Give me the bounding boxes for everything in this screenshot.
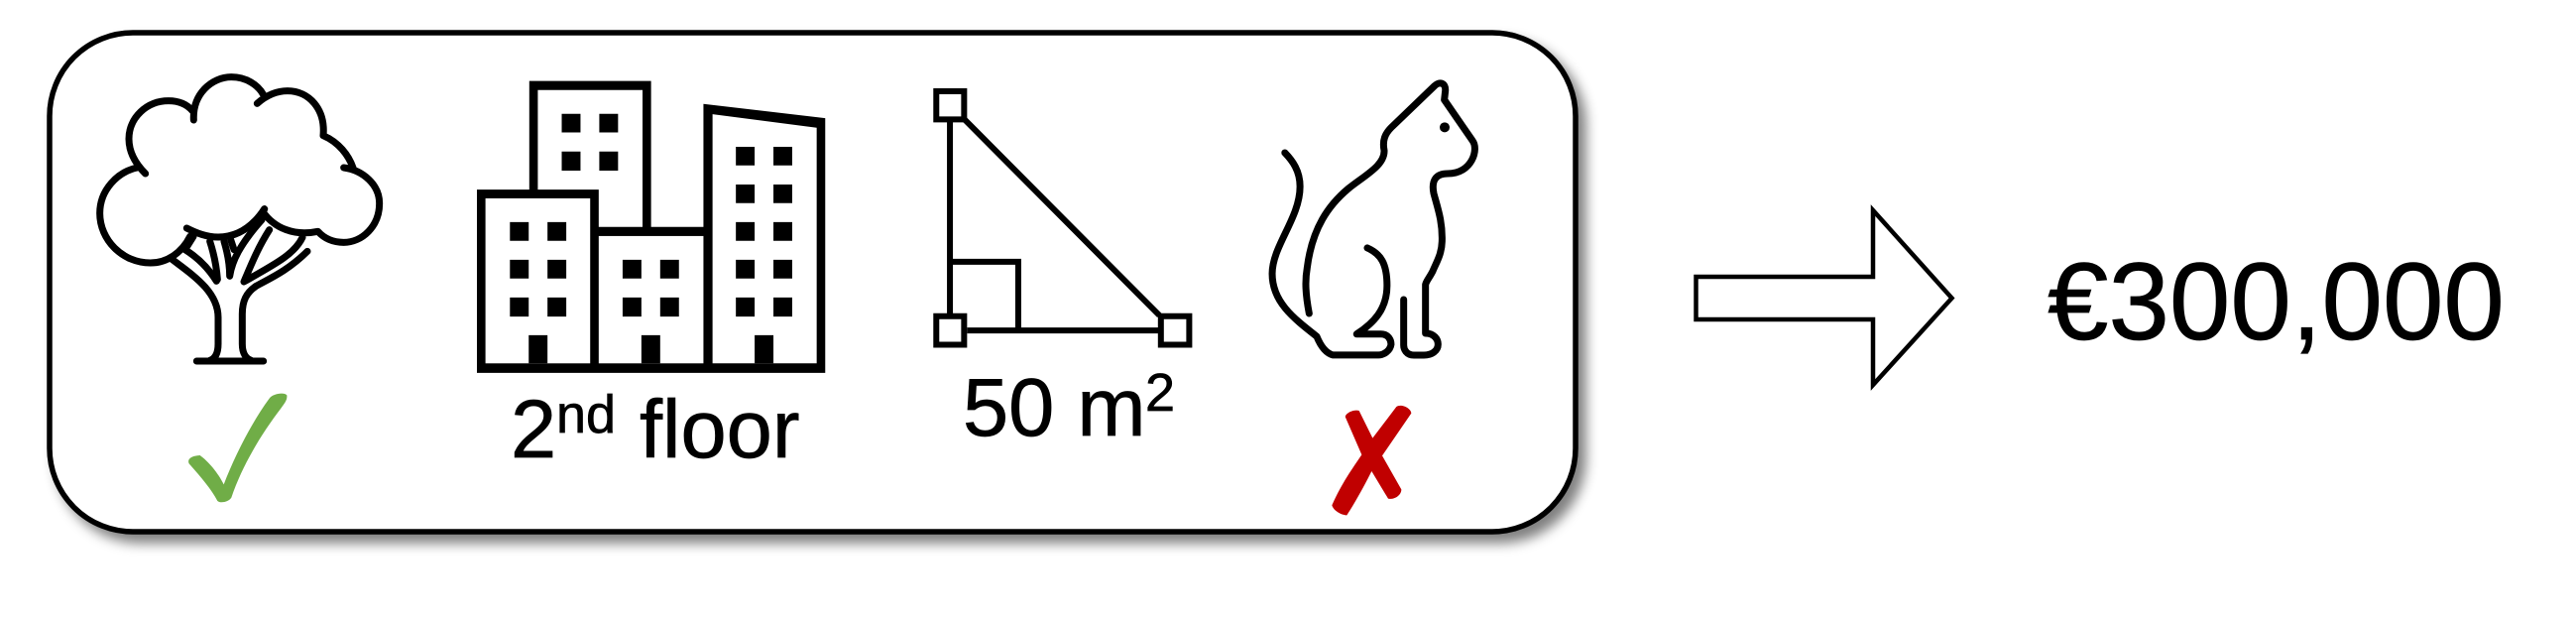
label: 2nd floor: nd [556, 385, 616, 444]
label: 50 m2: 50 m [963, 361, 1146, 453]
label: 50 m2: 2 [1145, 363, 1175, 423]
icon: right triangle floor area [936, 91, 1189, 344]
label: 2nd floor [511, 383, 799, 475]
arrow [1696, 210, 1951, 385]
icon: cat [1272, 83, 1474, 355]
icon: apartment buildings [477, 81, 825, 373]
label: 2nd floor: floor [640, 383, 799, 475]
icon: tree [100, 77, 380, 361]
panel: property features [50, 33, 1576, 532]
icon: green check mark [188, 394, 287, 502]
icon: red cross mark [1332, 406, 1411, 515]
price: €300,000 [2048, 241, 2505, 363]
label: 2nd floor: 2 [511, 383, 556, 475]
